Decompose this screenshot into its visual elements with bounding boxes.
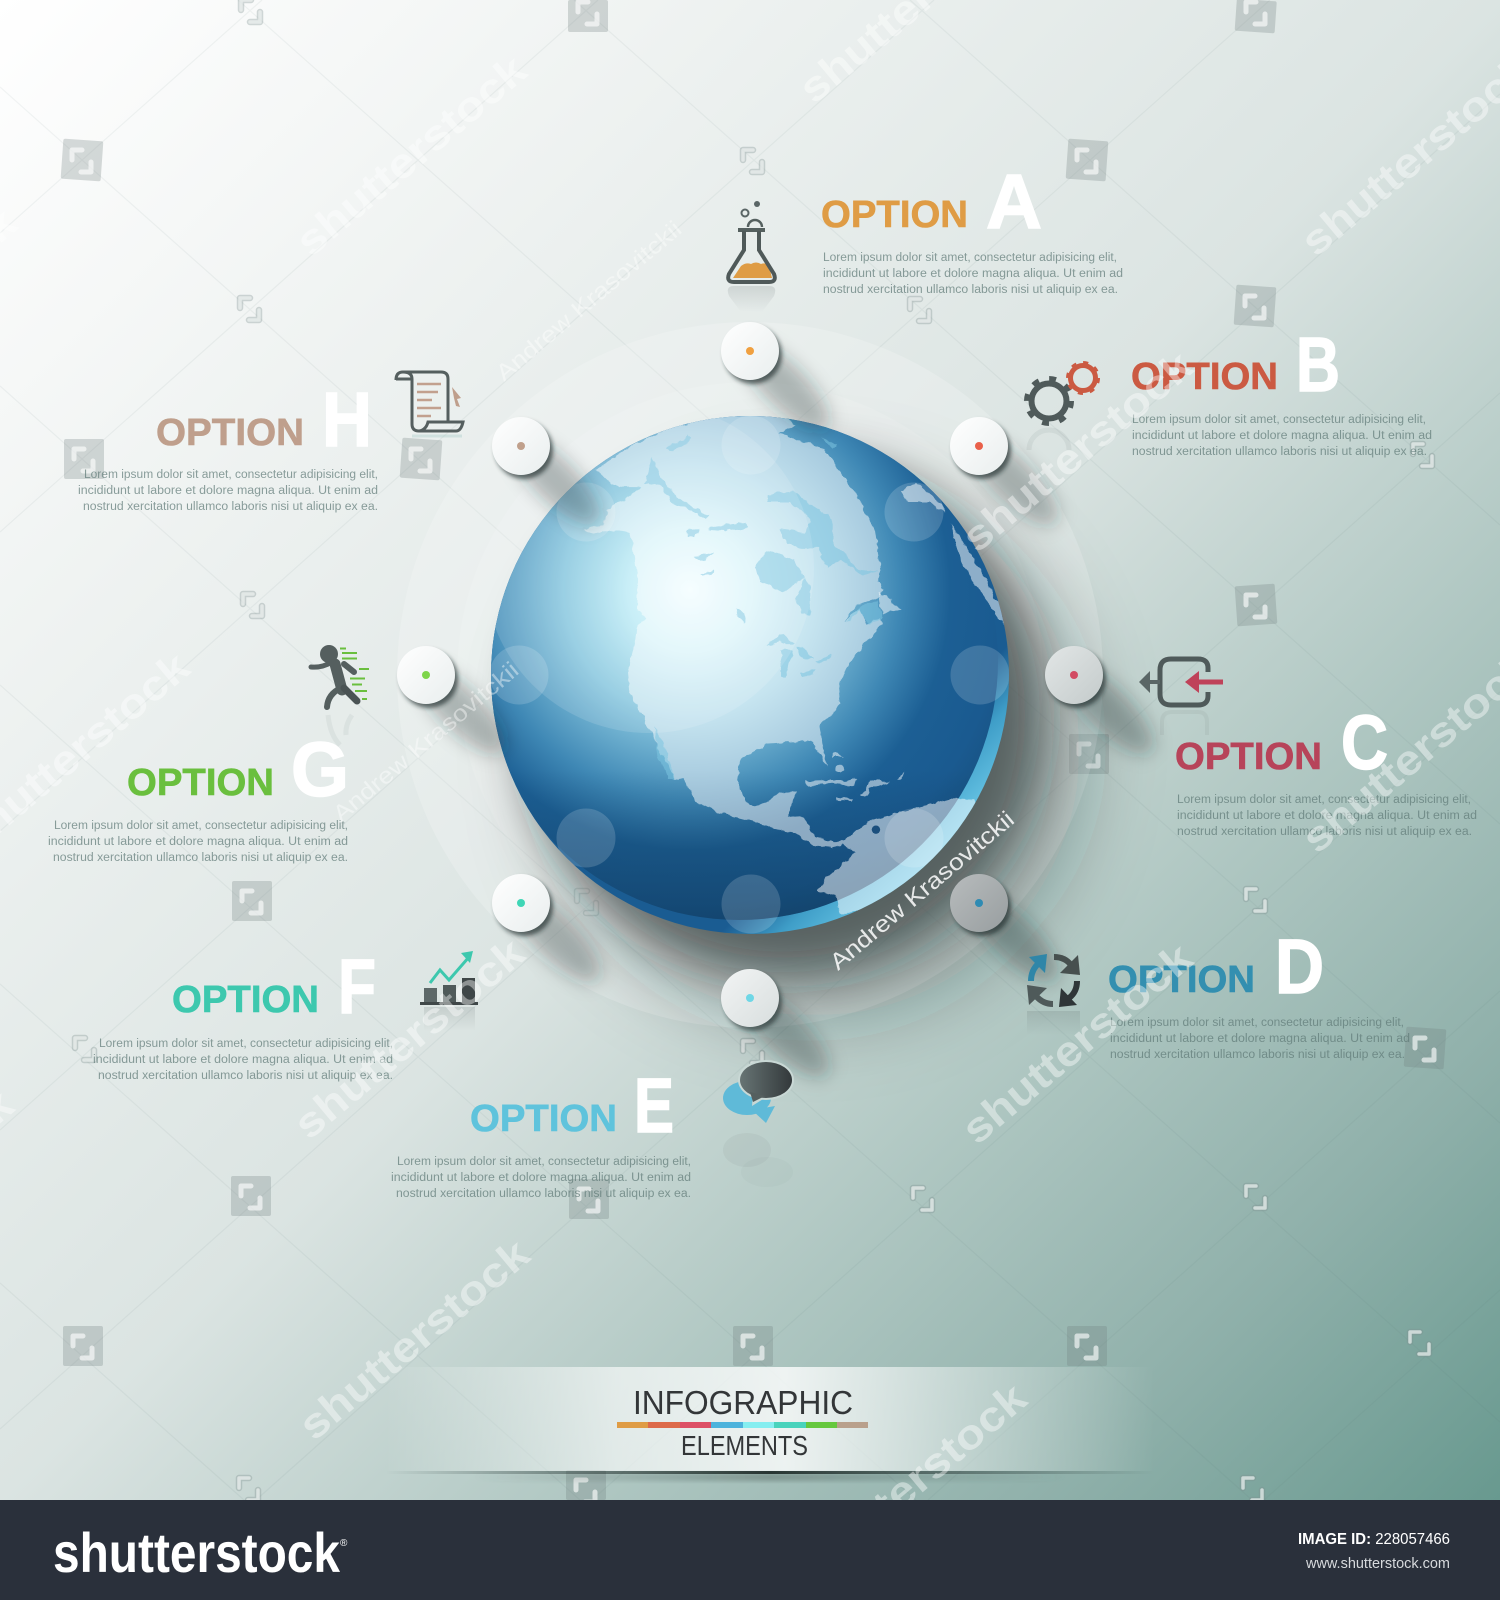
watermark text: shutterstock	[953, 341, 1202, 561]
option A text	[821, 159, 1123, 296]
option H text	[78, 377, 378, 513]
button shadows	[403, 328, 1165, 1089]
option G text: OPTION	[127, 762, 274, 804]
watermark text: shutterstock	[285, 928, 534, 1148]
button H	[492, 417, 553, 479]
option F text: Lorem ipsum dolor sit amet, consectetur adipisicing elit,	[99, 1038, 393, 1050]
orbit rings	[397, 322, 1103, 1028]
icon: exit arrows	[1139, 659, 1223, 735]
icon: cycle arrows	[1027, 954, 1080, 1035]
globe	[480, 402, 1010, 934]
button E	[721, 969, 782, 1031]
title: infographic: INFOGRAPHIC	[633, 1384, 853, 1421]
option A text: A	[986, 159, 1042, 245]
option B text	[1131, 322, 1432, 458]
option A text: incididunt ut labore et dolore magna aliqua. Ut enim ad	[823, 268, 1123, 280]
icon: scroll with cursor	[396, 372, 463, 436]
title: elements: ELEMENTS	[681, 1430, 808, 1461]
option E text: incididunt ut labore et dolore magna aliqua. Ut enim ad	[391, 1172, 691, 1184]
watermark text: Andrew Krasovitckii	[825, 806, 1019, 975]
option C text: C	[1341, 700, 1388, 786]
option D text: Lorem ipsum dolor sit amet, consectetur adipisicing elit,	[1110, 1017, 1404, 1029]
option H text: Lorem ipsum dolor sit amet, consectetur adipisicing elit,	[84, 469, 378, 481]
option B text: incididunt ut labore et dolore magna aliqua. Ut enim ad	[1132, 430, 1432, 442]
option D text: OPTION	[1108, 959, 1255, 1001]
title banner	[385, 1367, 1155, 1481]
watermark text: Andrew Krasovitckii	[491, 216, 686, 386]
option D text	[1108, 924, 1410, 1061]
option D text: nostrud xercitation ullamco laboris nisi ut aliquip ex ea.	[1110, 1049, 1405, 1061]
option B text: B	[1296, 322, 1340, 408]
option H text: incididunt ut labore et dolore magna aliqua. Ut enim ad	[78, 485, 378, 497]
footer logo: shutterstock	[53, 1521, 341, 1584]
option E text	[391, 1063, 691, 1200]
option B text: OPTION	[1131, 356, 1278, 398]
option A text: OPTION	[821, 194, 968, 236]
button F	[492, 874, 553, 936]
option F text: incididunt ut labore et dolore magna aliqua. Ut enim ad	[93, 1054, 393, 1066]
option E text: E	[634, 1063, 674, 1149]
button A	[721, 322, 782, 384]
option D text: D	[1275, 924, 1324, 1010]
option A text: nostrud xercitation ullamco laboris nisi ut aliquip ex ea.	[823, 284, 1118, 296]
option A text: Lorem ipsum dolor sit amet, consectetur adipisicing elit,	[823, 252, 1117, 264]
option C text: incididunt ut labore et dolore magna aliqua. Ut enim ad	[1177, 810, 1477, 822]
footer bar	[0, 1500, 1500, 1600]
button B	[950, 417, 1011, 479]
icon: speech bubbles	[723, 1060, 794, 1187]
option B text: Lorem ipsum dolor sit amet, consectetur adipisicing elit,	[1132, 414, 1426, 426]
globe shadow	[524, 457, 1080, 1016]
option G text: G	[291, 727, 349, 813]
button G	[397, 646, 458, 708]
option H text: nostrud xercitation ullamco laboris nisi ut aliquip ex ea.	[83, 501, 378, 513]
option C text: Lorem ipsum dolor sit amet, consectetur adipisicing elit,	[1177, 794, 1471, 806]
glass circles on globe	[490, 416, 1010, 934]
option D text: incididunt ut labore et dolore magna aliqua. Ut enim ad	[1110, 1033, 1410, 1045]
option E text: OPTION	[470, 1098, 617, 1140]
continents	[582, 415, 1003, 914]
registered mark: ®	[340, 1538, 348, 1549]
button C	[1045, 646, 1106, 708]
option E text: nostrud xercitation ullamco laboris nisi ut aliquip ex ea.	[396, 1188, 691, 1200]
watermark text: shutterstock	[287, 45, 536, 265]
watermark text: Andrew Krasovitckii	[328, 657, 523, 827]
watermark text: shutterstock	[787, 1373, 1036, 1593]
button D	[950, 874, 1011, 936]
icon: flask	[728, 201, 775, 312]
option G text: Lorem ipsum dolor sit amet, consectetur adipisicing elit,	[54, 820, 348, 832]
option G text	[48, 727, 349, 864]
light overlay disc	[484, 403, 814, 733]
option B text: nostrud xercitation ullamco laboris nisi ut aliquip ex ea.	[1132, 446, 1427, 458]
option G text: nostrud xercitation ullamco laboris nisi ut aliquip ex ea.	[53, 852, 348, 864]
icon: running figure	[311, 645, 369, 745]
option G text: incididunt ut labore et dolore magna aliqua. Ut enim ad	[48, 836, 348, 848]
option F text: F	[338, 944, 376, 1030]
option C text: OPTION	[1175, 736, 1322, 778]
website: www.shutterstock.com	[1305, 1555, 1450, 1572]
option H text: H	[322, 377, 372, 463]
icon: gears	[1026, 363, 1098, 450]
option C text	[1175, 700, 1477, 838]
option F text: OPTION	[172, 979, 319, 1021]
colour strip	[617, 1422, 868, 1428]
option F text	[93, 944, 393, 1082]
image id: IMAGE ID: 228057466	[1298, 1531, 1450, 1548]
option H text: OPTION	[156, 412, 304, 454]
watermark text: shutterstock	[953, 933, 1202, 1153]
option C text: nostrud xercitation ullamco laboris nisi ut aliquip ex ea.	[1177, 826, 1472, 838]
option F text: nostrud xercitation ullamco laboris nisi ut aliquip ex ea.	[98, 1070, 393, 1082]
option E text: Lorem ipsum dolor sit amet, consectetur adipisicing elit,	[397, 1156, 691, 1168]
icon: growth chart	[420, 951, 478, 1031]
watermark text: shutterstock	[290, 1229, 539, 1449]
